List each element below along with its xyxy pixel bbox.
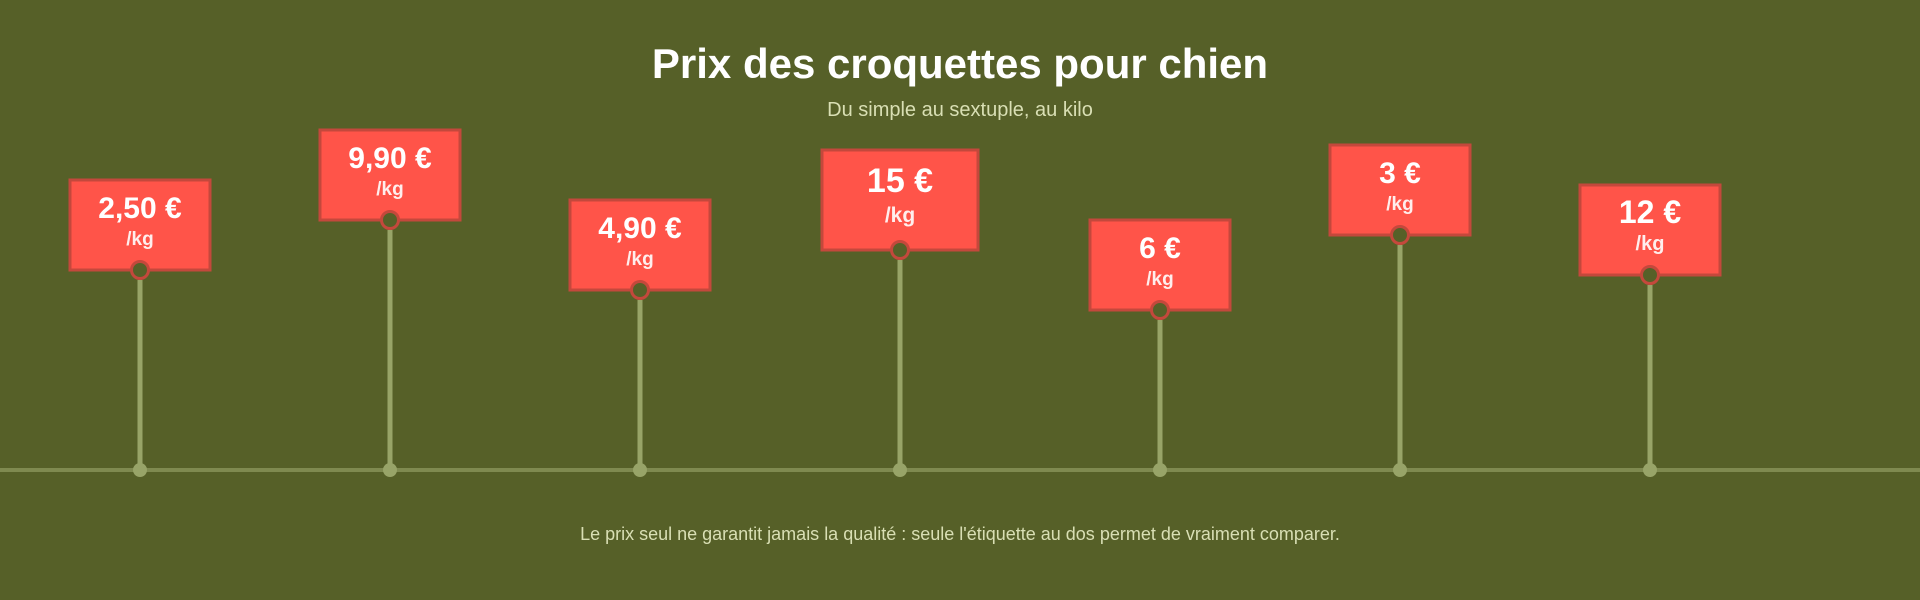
price tag: 15 € bbox=[822, 150, 978, 477]
price tag: 2,50 € bbox=[70, 180, 210, 477]
price tag: 15 €: 15 € bbox=[867, 162, 933, 200]
price tag: 3 €: 3 € bbox=[1379, 157, 1421, 190]
horizontal axis line bbox=[0, 468, 1920, 472]
footer note: Le prix seul ne garantit jamais la qualité : seule l'étiquette au dos permet de vraiment comparer. bbox=[580, 524, 1340, 544]
price tag: 3 €: /kg bbox=[1386, 194, 1414, 215]
price tag: 4,90 € bbox=[570, 200, 710, 477]
price tag: 3 € bbox=[1330, 145, 1470, 477]
price tag: 6 € bbox=[1090, 220, 1230, 477]
price tag: 9,90 € bbox=[320, 130, 460, 477]
price tag: 4,90 €: /kg bbox=[626, 249, 654, 270]
price tag: 6 €: 6 € bbox=[1139, 232, 1181, 265]
title: Prix des croquettes pour chien bbox=[652, 40, 1268, 87]
price tag: 15 €: /kg bbox=[885, 204, 915, 227]
subtitle: Du simple au sextuple, au kilo bbox=[827, 99, 1093, 121]
price tag: 9,90 €: /kg bbox=[376, 179, 404, 200]
price tag: 12 € bbox=[1580, 185, 1720, 477]
price tag: 12 €: /kg bbox=[1636, 233, 1664, 255]
price tag: 2,50 €: 2,50 € bbox=[98, 192, 182, 225]
price tag: 6 €: /kg bbox=[1146, 269, 1174, 290]
price tag: 9,90 €: 9,90 € bbox=[348, 142, 432, 175]
price tag: 2,50 €: /kg bbox=[126, 229, 154, 250]
price tag: 12 €: 12 € bbox=[1619, 194, 1681, 230]
price tag: 4,90 €: 4,90 € bbox=[598, 212, 682, 245]
